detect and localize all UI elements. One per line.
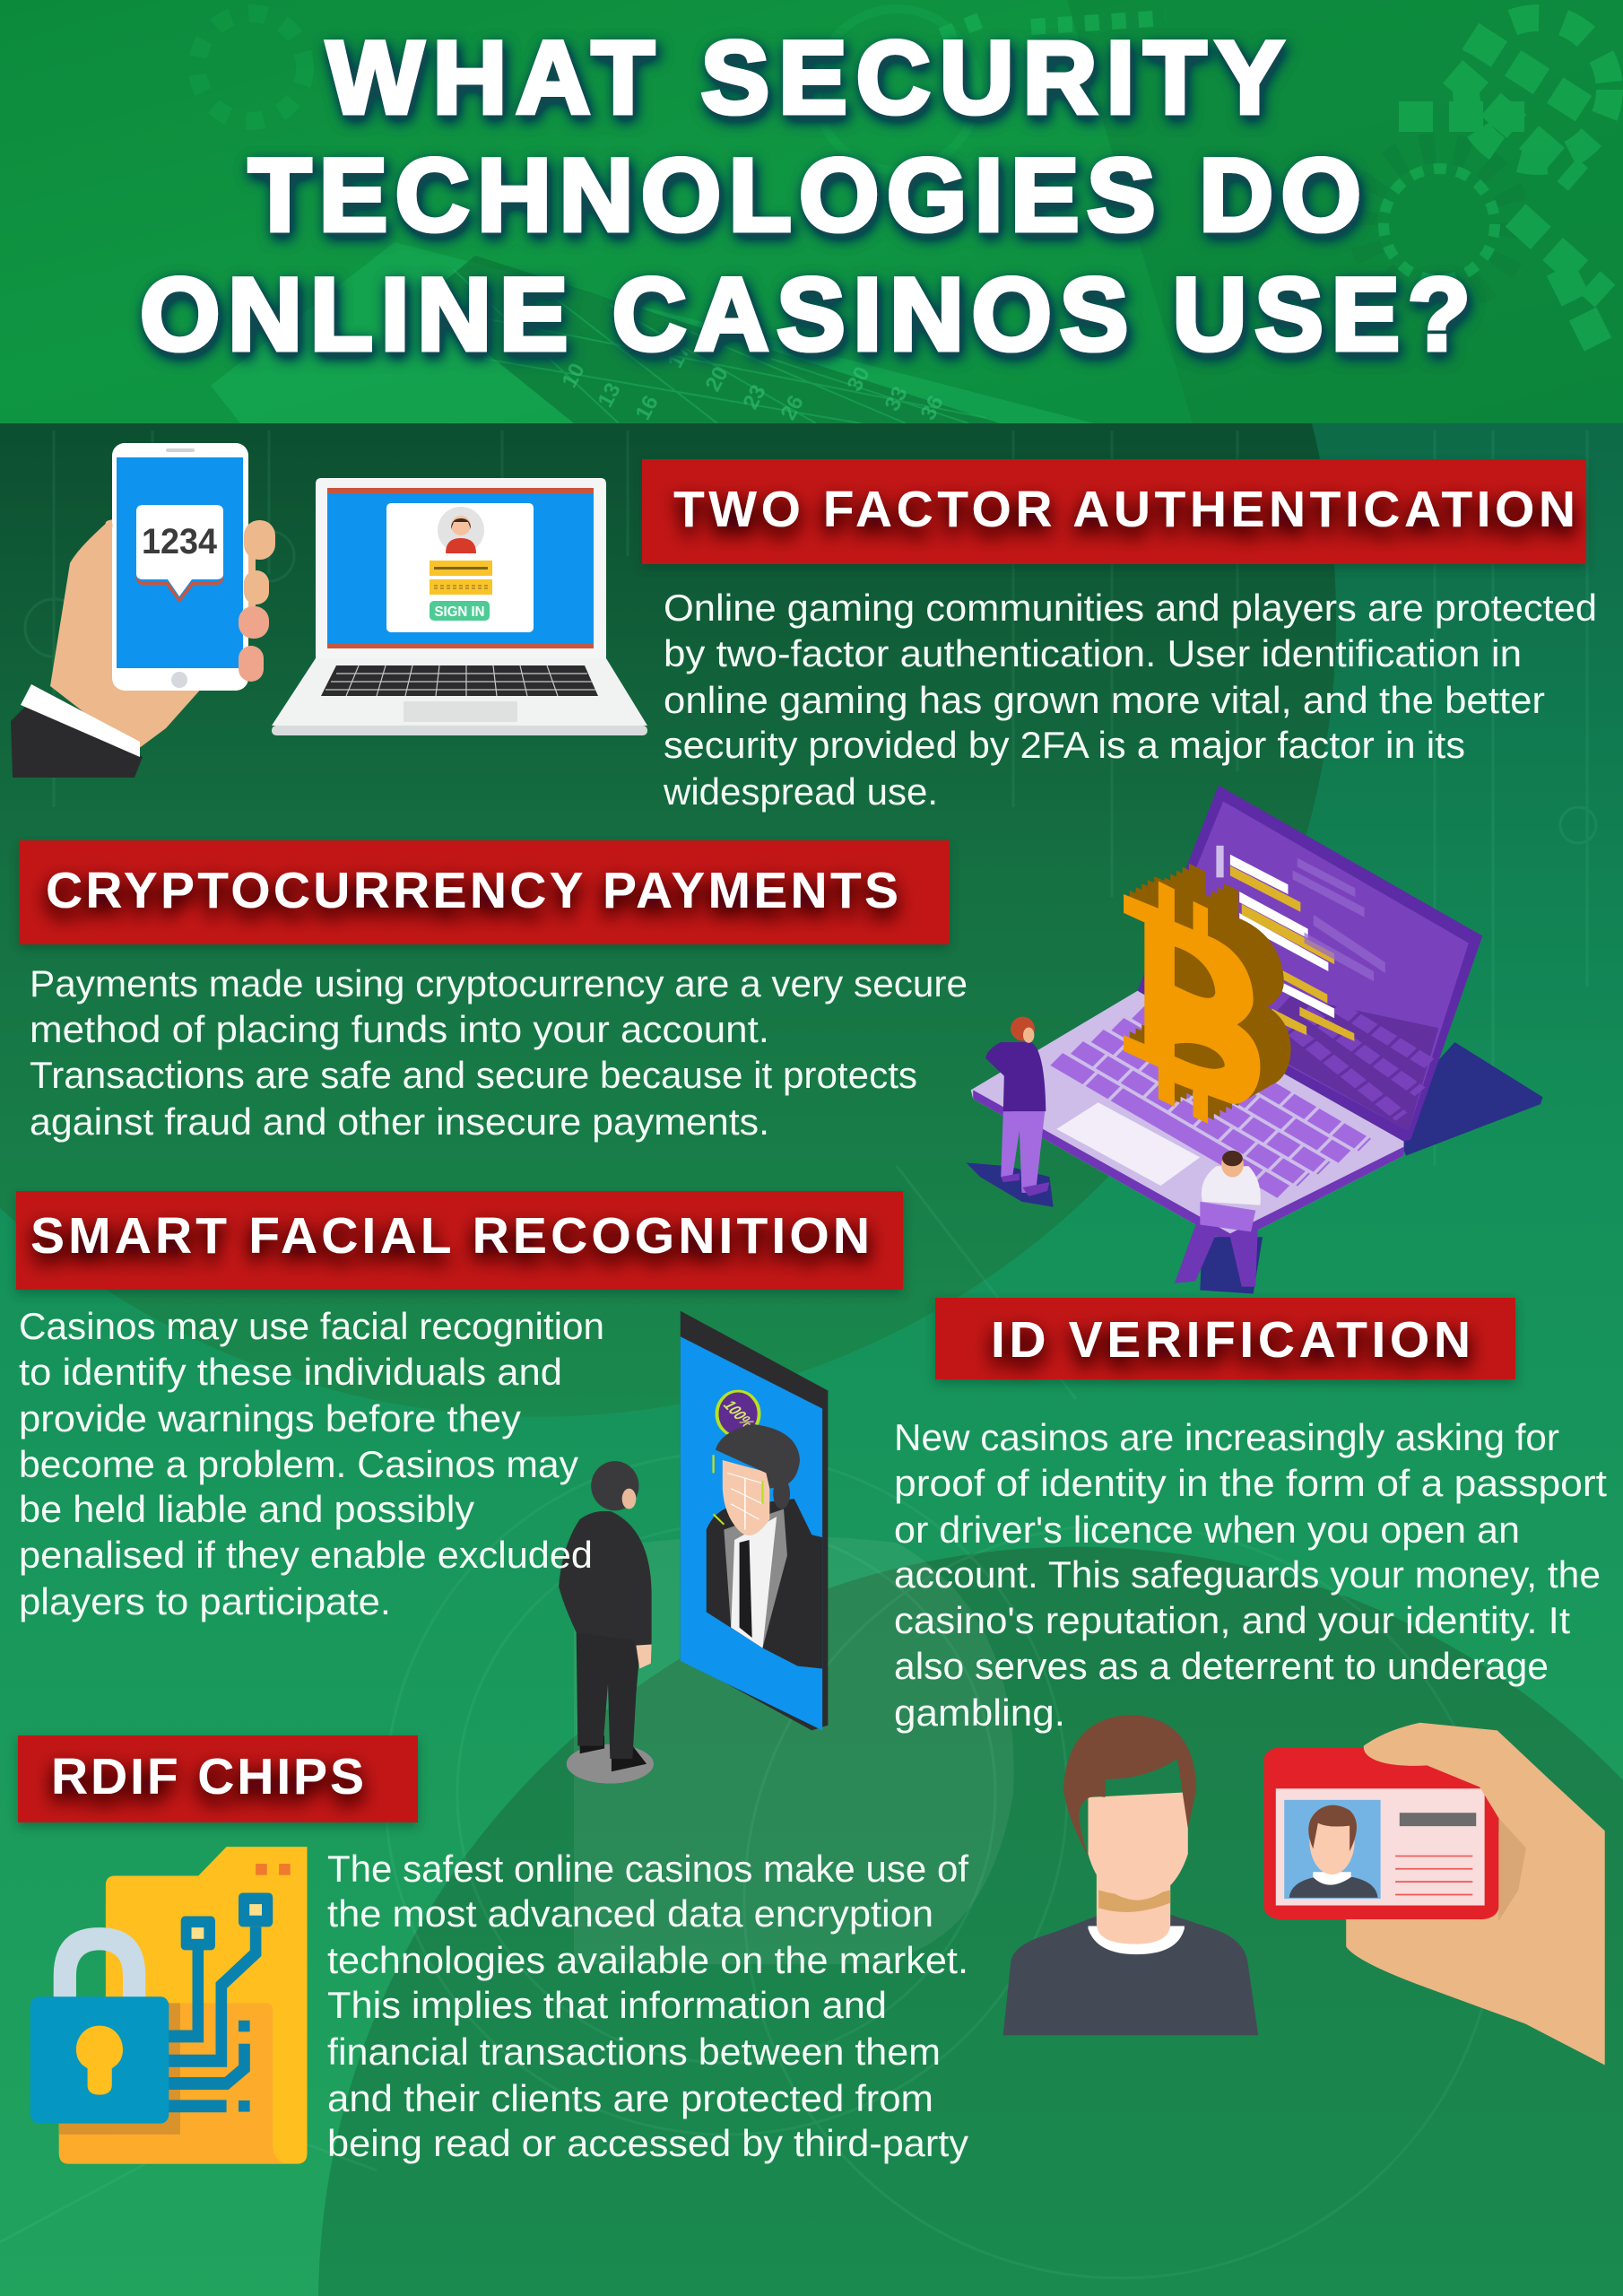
panel: cryptocurrency payments	[19, 786, 1543, 1293]
text: rdif chips body: This implies that information and	[327, 1984, 887, 2026]
roulette table numbers: 33	[880, 383, 913, 415]
roulette table numbers: 20	[700, 363, 733, 396]
text: cryptocurrency body: method of placing funds into your account.	[30, 1008, 769, 1050]
text: facial recognition body: players to participate.	[19, 1580, 391, 1622]
text: two factor authentication body: Online gaming communities and players are protected	[664, 587, 1597, 629]
title	[140, 21, 1471, 372]
heading: rdif chips	[18, 1735, 418, 1822]
roulette table numbers	[563, 349, 942, 422]
heading: two factor authentication: TWO FACTOR AUTHENTICATION	[673, 481, 1575, 538]
text: facial recognition body: Casinos may use facial recognition	[19, 1305, 604, 1347]
header background: chips and roulette table	[0, 0, 1623, 424]
text: facial recognition body: be held liable and possibly	[19, 1488, 474, 1530]
icon: hand holding phone with code: 1234	[142, 522, 218, 561]
text: id verification body	[894, 1416, 1607, 1734]
icon: person facing phone with face scan	[559, 1311, 828, 1784]
text: id verification body: casino's reputation, and your identity. It	[894, 1599, 1570, 1641]
heading: id verification	[935, 1298, 1515, 1379]
roulette table numbers: 16	[630, 392, 664, 424]
text: id verification body: or driver's licence when you open an	[894, 1509, 1520, 1551]
icon: bitcoin on isometric laptop with people	[966, 786, 1543, 1293]
heading: two factor authentication	[642, 459, 1586, 564]
text: cryptocurrency body: Payments made using cryptocurrency are a very secure	[30, 962, 968, 1004]
text: rdif chips body: the most advanced data encryption	[327, 1892, 933, 1935]
text: cryptocurrency body: against fraud and other insecure payments.	[30, 1100, 769, 1143]
text: rdif chips body	[327, 1848, 968, 2164]
icon: laptop with sign-in form: SIGN IN	[434, 604, 484, 620]
panel: two factor authentication	[11, 443, 1597, 813]
text: id verification body: account. This safeguards your money, the	[894, 1553, 1601, 1596]
title: TECHNOLOGIES DO	[248, 138, 1361, 253]
icon: person facing phone with face scan: 100%	[719, 1398, 759, 1431]
roulette table numbers: 13	[593, 379, 626, 412]
icon: padlock and circuit folder	[30, 1847, 308, 2164]
title: WHAT SECURITY	[326, 21, 1284, 135]
text: two factor authentication body	[663, 587, 1597, 813]
heading: cryptocurrency payments: CRYPTOCURRENCY PAYMENTS	[46, 862, 898, 919]
roulette table numbers: 26	[776, 392, 809, 424]
keyboard keys	[1056, 1013, 1365, 1192]
text: id verification body: New casinos are increasingly asking for	[894, 1416, 1559, 1458]
icon: person portrait	[1003, 1715, 1258, 2035]
icon: laptop with sign-in form	[272, 478, 647, 735]
panel: id verification	[894, 1298, 1607, 2065]
text: facial recognition body: to identify these individuals and	[19, 1351, 562, 1393]
panel: smart facial recognition	[16, 1191, 903, 1784]
icon: hand holding phone with code	[11, 443, 275, 778]
text: cryptocurrency body	[30, 962, 968, 1143]
panel: rdif chips	[18, 1735, 968, 2164]
roulette table numbers: 30	[842, 363, 875, 396]
heading: smart facial recognition: SMART FACIAL RECOGNITION	[30, 1207, 870, 1265]
title: ONLINE CASINOS USE?	[140, 257, 1471, 372]
text: cryptocurrency body: Transactions are safe and secure because it protects	[30, 1054, 917, 1096]
text: rdif chips body: financial transactions between them	[327, 2031, 941, 2073]
text: two factor authentication body: widespread use.	[663, 770, 938, 813]
text: id verification body: also serves as a deterrent to underage	[894, 1645, 1549, 1687]
heading: id verification: ID VERIFICATION	[991, 1311, 1471, 1369]
text: two factor authentication body: security provided by 2FA is a major factor in its	[664, 724, 1465, 766]
text: two factor authentication body: online gaming has grown more vital, and the better	[664, 679, 1545, 721]
heading: cryptocurrency payments	[19, 840, 950, 944]
text: facial recognition body: become a problem. Casinos may	[19, 1443, 578, 1485]
text: facial recognition body: penalised if they enable excluded	[19, 1534, 593, 1576]
icon: hand holding id card	[1263, 1723, 1605, 2065]
text: rdif chips body: technologies available on the market.	[327, 1939, 968, 1981]
text: rdif chips body: and their clients are protected from	[327, 2077, 933, 2119]
text: facial recognition body	[19, 1305, 604, 1622]
heading: smart facial recognition	[16, 1191, 903, 1290]
text: id verification body: gambling.	[894, 1692, 1065, 1734]
text: two factor authentication body: by two-factor authentication. User identification in	[664, 632, 1522, 674]
text: rdif chips body: being read or accessed by third-party	[327, 2122, 968, 2164]
roulette table numbers: 10	[557, 360, 590, 392]
heading: rdif chips: RDIF CHIPS	[51, 1748, 364, 1805]
roulette table numbers: 36	[916, 392, 949, 424]
text: id verification body: proof of identity in the form of a passport	[894, 1462, 1607, 1504]
roulette table numbers: 23	[738, 381, 771, 413]
roulette table numbers: 17	[663, 340, 696, 372]
text: facial recognition body: provide warnings before they	[19, 1397, 521, 1439]
text: rdif chips body: The safest online casinos make use of	[327, 1848, 968, 1890]
